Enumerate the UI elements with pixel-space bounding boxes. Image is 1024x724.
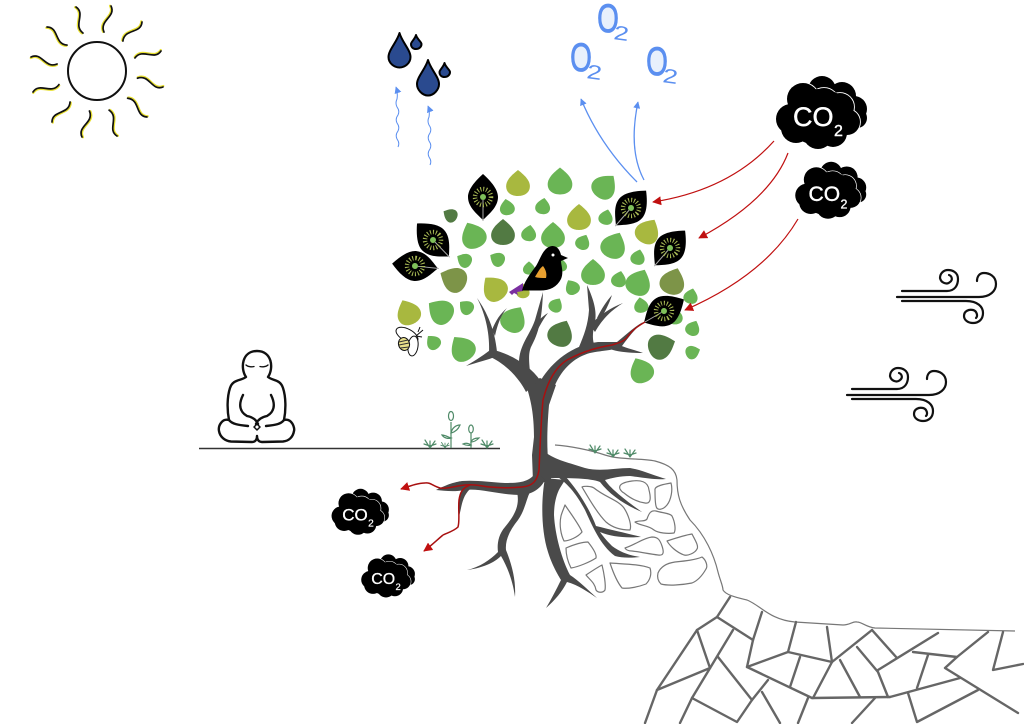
plants on the ground bbox=[424, 412, 493, 448]
icon: CO2 cloud medium: CO bbox=[809, 183, 840, 206]
ground line bbox=[199, 448, 500, 450]
rock strata lower right bbox=[645, 597, 1023, 723]
labels: oxygen O2: O bbox=[570, 36, 592, 80]
icon: CO2 cloud lower left: 2 bbox=[368, 519, 374, 530]
labels: oxygen O2: O bbox=[646, 40, 668, 84]
icon: water drops bbox=[388, 33, 450, 96]
red arrows: CO2 into leaves bbox=[653, 141, 798, 310]
arrows: oxygen released from leaves bbox=[581, 99, 644, 182]
labels: oxygen O2: 2 bbox=[585, 60, 603, 85]
icon: CO2 cloud large: CO bbox=[793, 102, 834, 132]
icon: CO2 cloud medium: 2 bbox=[840, 198, 847, 212]
icon: CO2 cloud large bbox=[776, 76, 867, 149]
tree trunk, branches and roots bbox=[436, 285, 666, 608]
soil stones around the roots bbox=[560, 481, 707, 592]
labels: oxygen O2 bbox=[570, 0, 679, 89]
tree leaves: green canopy bbox=[392, 168, 703, 387]
icon: CO2 cloud lowest bbox=[361, 554, 415, 597]
black carbon-absorbing leaves bbox=[391, 174, 696, 336]
labels: oxygen O2: 2 bbox=[612, 21, 630, 46]
icon: meditating person bbox=[219, 351, 294, 442]
icon: CO2 cloud lowest: CO bbox=[371, 571, 395, 588]
grass on hillside bbox=[589, 445, 636, 457]
icon: sun bbox=[30, 5, 164, 138]
arrows: water vapour rising bbox=[396, 87, 431, 165]
red line: carbon flow through tree to roots bbox=[401, 322, 645, 551]
icon: CO2 cloud lower left: CO bbox=[342, 505, 368, 524]
icon: bee bbox=[394, 324, 423, 357]
icon: CO2 cloud large: 2 bbox=[834, 123, 843, 140]
icon: wind lower bbox=[847, 368, 946, 421]
icon: CO2 cloud lowest: 2 bbox=[395, 582, 401, 593]
labels: oxygen O2: 2 bbox=[661, 64, 679, 89]
icon: wind upper bbox=[897, 270, 996, 323]
icon: CO2 cloud lower left bbox=[332, 489, 389, 535]
icon: CO2 cloud medium bbox=[795, 162, 866, 219]
icon: bird bbox=[509, 246, 568, 295]
soil outline on the hillside bbox=[555, 445, 1015, 631]
